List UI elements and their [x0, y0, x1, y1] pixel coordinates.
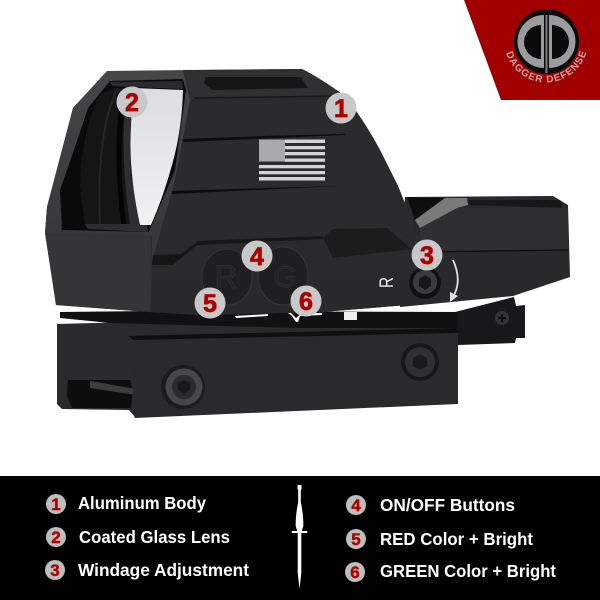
callout 4: 4	[250, 243, 264, 271]
top slot	[204, 77, 308, 90]
callout 6: 6	[299, 288, 313, 316]
callout 1	[326, 92, 356, 124]
main body	[45, 69, 422, 315]
button recess	[150, 238, 420, 315]
legend item 2: 2	[51, 528, 61, 547]
legend item 6: GREEN Color + Bright	[380, 561, 556, 581]
under-hood shadow	[152, 236, 323, 265]
legend item 4: 4	[351, 496, 361, 515]
legend item 2: Coated Glass Lens	[79, 527, 230, 547]
callout 6	[290, 286, 322, 316]
screw: rear mount	[401, 343, 439, 381]
brand corner: Dagger Defense logo	[464, 0, 600, 100]
wedge shadow	[323, 228, 412, 258]
legend item 3: 3	[50, 561, 60, 580]
legend item 1: 1	[51, 495, 61, 514]
legend item 4: ON/OFF Buttons	[380, 495, 515, 515]
buttons R and G: G	[273, 261, 297, 294]
callout 4	[242, 240, 272, 272]
windage screw	[409, 267, 441, 299]
spacer plate	[60, 311, 458, 328]
callout 1: 1	[334, 95, 348, 123]
rear housing	[400, 196, 570, 307]
product photo: red dot sight	[45, 69, 570, 418]
legend item 5: RED Color + Bright	[380, 529, 533, 549]
screw: front mount	[161, 365, 205, 409]
mount base	[57, 322, 458, 418]
callout markers on photo	[116, 86, 442, 318]
callout 5	[194, 288, 226, 318]
legend item 5: 5	[351, 530, 361, 549]
rotation arrow	[450, 260, 458, 302]
callout 3: 3	[420, 242, 434, 270]
legend item 6: 6	[350, 563, 360, 582]
grooves	[183, 134, 345, 142]
upper face	[152, 96, 420, 262]
lens	[130, 88, 183, 225]
legend item 3: Windage Adjustment	[78, 560, 249, 580]
R label: R	[377, 277, 398, 288]
callout 2: 2	[125, 89, 139, 117]
flag engraving	[259, 140, 325, 180]
rear mount ring	[455, 297, 525, 345]
brand corner: Dagger Defense logo: DAGGER DEFENSE	[506, 50, 586, 82]
top strip	[183, 69, 345, 98]
window recess	[60, 79, 186, 232]
dagger divider icon	[292, 485, 307, 589]
callout 5: 5	[203, 290, 217, 318]
hood rim	[45, 71, 190, 262]
buttons R and G: R	[214, 259, 238, 295]
legend band	[0, 476, 600, 600]
buttons R and G	[202, 247, 308, 305]
lower left face	[45, 233, 152, 312]
callout 2	[116, 86, 148, 118]
legend item 1: Aluminum Body	[78, 493, 206, 513]
callout 3	[412, 240, 442, 270]
lens bezel	[124, 88, 140, 225]
